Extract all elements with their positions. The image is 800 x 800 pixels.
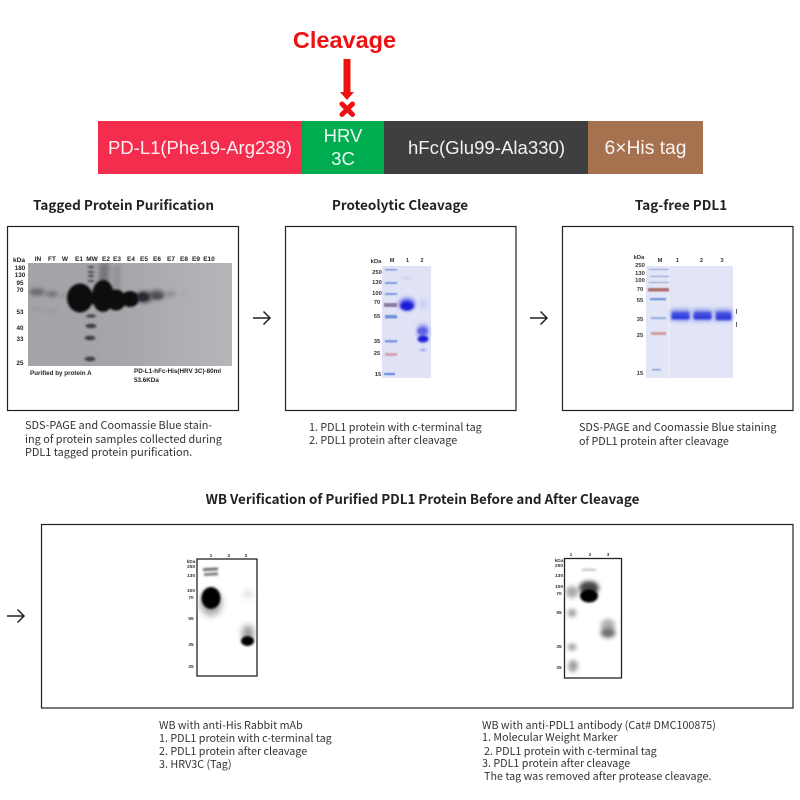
marker labels: 250 xyxy=(372,270,382,276)
caption: purification: ing of protein samples collected during xyxy=(25,431,222,447)
blot: anti-His xyxy=(187,553,257,676)
marker labels: M xyxy=(390,258,395,264)
marker labels: 95 xyxy=(16,280,24,287)
marker labels: 70 xyxy=(16,287,24,294)
cleavage label: Cleavage xyxy=(293,27,396,53)
marker labels: 55 xyxy=(637,298,644,304)
segment: His tag xyxy=(588,121,703,174)
caption: cleavage xyxy=(309,420,482,448)
marker labels: 35 xyxy=(637,317,644,323)
gel image xyxy=(382,266,431,378)
caption: anti-PDL1 blot: The tag was removed after protease cleavage. xyxy=(484,769,711,784)
caption: anti-PDL1 blot: 1. Molecular Weight Marker xyxy=(482,730,618,745)
blot: anti-PDL1: 3 xyxy=(607,552,610,558)
caption: cleavage: 2. PDL1 protein after cleavage xyxy=(309,433,457,448)
marker labels: 2 xyxy=(420,258,424,264)
panel: tag-free gel xyxy=(562,226,793,410)
blot: anti-His: 70 xyxy=(188,595,194,601)
blot: anti-PDL1 xyxy=(555,552,622,678)
lane labels: E7 xyxy=(167,256,175,263)
segment: hFc xyxy=(384,121,588,174)
icon: cleavage arrow xyxy=(340,59,354,100)
segment: HRV 3C: 3C xyxy=(331,148,355,169)
arrow xyxy=(253,312,270,324)
blot: anti-His: kDa xyxy=(187,559,196,565)
band markers xyxy=(736,309,738,327)
caption: anti-PDL1 blot: 2. PDL1 protein with c-terminal tag xyxy=(484,744,657,759)
gel captions: PD-L1-hFc-His(HRV 3C)-80ml xyxy=(134,368,221,375)
caption: purification: SDS-PAGE and Coomassie Blue stain- xyxy=(25,417,212,433)
blot: anti-PDL1: 35 xyxy=(556,644,562,650)
marker labels: 1 xyxy=(676,258,680,264)
lane labels: E6 xyxy=(153,256,161,263)
blot: anti-PDL1: 1 xyxy=(570,552,573,558)
marker labels: 15 xyxy=(375,372,382,378)
lane labels: E5 xyxy=(140,256,148,263)
marker labels: 35 xyxy=(374,339,381,345)
segment: HRV 3C: HRV xyxy=(324,125,363,146)
lane labels: kDa xyxy=(13,257,25,264)
marker labels: 15 xyxy=(637,371,644,377)
marker labels: 25 xyxy=(374,351,381,357)
marker labels: 70 xyxy=(374,300,380,306)
marker labels: 2 xyxy=(700,258,703,264)
lane labels: E1 xyxy=(75,256,83,263)
caption: tag-free: SDS-PAGE and Coomassie Blue staining xyxy=(579,419,776,435)
marker labels: kDa xyxy=(371,259,382,265)
lane labels: E4 xyxy=(127,256,135,263)
panel: purification gel xyxy=(8,226,238,410)
gel captions: 53.6KDa xyxy=(134,377,159,384)
lane labels: E2 xyxy=(102,256,110,263)
marker labels: 130 xyxy=(15,272,26,279)
caption: anti-His blot: 1. PDL1 protein with c-terminal tag xyxy=(159,731,332,746)
blot: anti-His: 250 xyxy=(187,564,195,570)
marker labels: 70 xyxy=(637,287,643,293)
marker labels: 3 xyxy=(720,258,724,264)
blot: anti-PDL1: 25 xyxy=(556,665,562,671)
marker labels: 250 xyxy=(635,263,645,269)
marker labels: 130 xyxy=(372,280,382,286)
marker labels xyxy=(371,258,424,378)
blot: anti-His: 130 xyxy=(187,573,195,579)
arrow xyxy=(530,312,547,324)
marker labels: 53 xyxy=(16,309,24,316)
marker labels: 55 xyxy=(374,314,381,320)
lane labels: IN xyxy=(35,256,42,263)
blot: anti-PDL1: 70 xyxy=(556,591,562,597)
blot: anti-His: 1 xyxy=(210,553,213,559)
caption: anti-His blot: 2. PDL1 protein after cleavage xyxy=(159,744,307,759)
caption: anti-His blot: WB with anti-His Rabbit mAb xyxy=(159,718,303,733)
heading: proteolytic cleavage: Proteolytic Cleavage xyxy=(332,194,468,214)
heading: tag-free PDL1: Tag-free PDL1 xyxy=(635,194,727,214)
construct bar xyxy=(98,121,703,174)
blot: anti-PDL1: 100 xyxy=(555,584,563,590)
marker labels: 25 xyxy=(637,333,644,339)
blot: anti-PDL1: 130 xyxy=(555,573,563,579)
heading: WB verification: WB Verification of Purified PDL1 Protein Before and After Cleavage xyxy=(206,488,640,508)
marker labels xyxy=(15,265,26,367)
blot: anti-His: 25 xyxy=(188,664,194,670)
icon: cleavage cross xyxy=(342,104,352,114)
caption: cleavage: 1. PDL1 protein with c-terminal tag xyxy=(309,420,482,435)
marker labels: 25 xyxy=(16,360,24,367)
lane labels: MW xyxy=(86,256,99,263)
lane labels: E3 xyxy=(113,256,121,263)
segment: hFc: hFc(Glu99-Ala330) xyxy=(408,137,565,158)
marker labels: 1 xyxy=(406,258,410,264)
blot: anti-PDL1: 2 xyxy=(589,552,592,558)
marker labels: 130 xyxy=(635,271,645,277)
gel captions xyxy=(30,368,221,384)
caption: purification xyxy=(25,417,222,460)
gel image xyxy=(28,263,232,366)
gel captions: Purified by protein A xyxy=(30,370,92,377)
marker labels: M xyxy=(658,258,663,264)
blot: anti-His: 35 xyxy=(188,642,194,648)
lane labels: FT xyxy=(48,256,56,263)
marker labels: 33 xyxy=(16,336,24,343)
marker labels: 100 xyxy=(635,278,645,284)
blot: anti-PDL1: 250 xyxy=(555,563,563,569)
segment: HRV 3C xyxy=(302,121,384,174)
heading: tagged protein purification: Tagged Protein Purification xyxy=(33,194,214,214)
panel: western blots xyxy=(42,524,793,708)
blot: anti-His: 55 xyxy=(188,616,194,622)
blot: anti-His: 2 xyxy=(228,553,231,559)
blot: anti-PDL1: 55 xyxy=(556,610,562,616)
marker labels: kDa xyxy=(634,255,645,261)
segment: His tag: 6×His tag xyxy=(604,138,686,159)
gel image xyxy=(646,266,733,378)
blot: anti-His: 100 xyxy=(187,588,195,594)
arrow xyxy=(7,610,24,622)
caption: anti-His blot: 3. HRV3C (Tag) xyxy=(159,757,232,772)
segment: PD-L1 xyxy=(98,121,302,174)
lane labels: E8 xyxy=(180,256,188,263)
marker labels: 100 xyxy=(372,291,382,297)
caption: anti-PDL1 blot: WB with anti-PDL1 antibody (Cat# DMC100875) xyxy=(482,718,716,733)
marker labels: 40 xyxy=(16,325,24,332)
caption: tag-free xyxy=(579,419,776,449)
blot: anti-His: 3 xyxy=(245,553,248,559)
caption: purification: PDL1 tagged protein purification. xyxy=(25,444,192,460)
marker labels: 180 xyxy=(15,265,26,272)
lane labels: W xyxy=(62,256,69,263)
blot: anti-PDL1: kDa xyxy=(555,558,564,564)
lane labels: E9 xyxy=(192,256,200,263)
lane labels xyxy=(13,256,215,264)
caption: anti-His blot xyxy=(159,718,332,772)
caption: tag-free: of PDL1 protein after cleavage xyxy=(579,433,729,449)
lane labels: E10 xyxy=(203,256,215,263)
panel: cleavage gel xyxy=(286,226,516,410)
marker labels xyxy=(634,255,724,377)
caption: anti-PDL1 blot xyxy=(482,718,716,784)
segment: PD-L1: PD-L1(Phe19-Arg238) xyxy=(108,137,292,158)
caption: anti-PDL1 blot: 3. PDL1 protein after cleavage xyxy=(482,756,630,771)
